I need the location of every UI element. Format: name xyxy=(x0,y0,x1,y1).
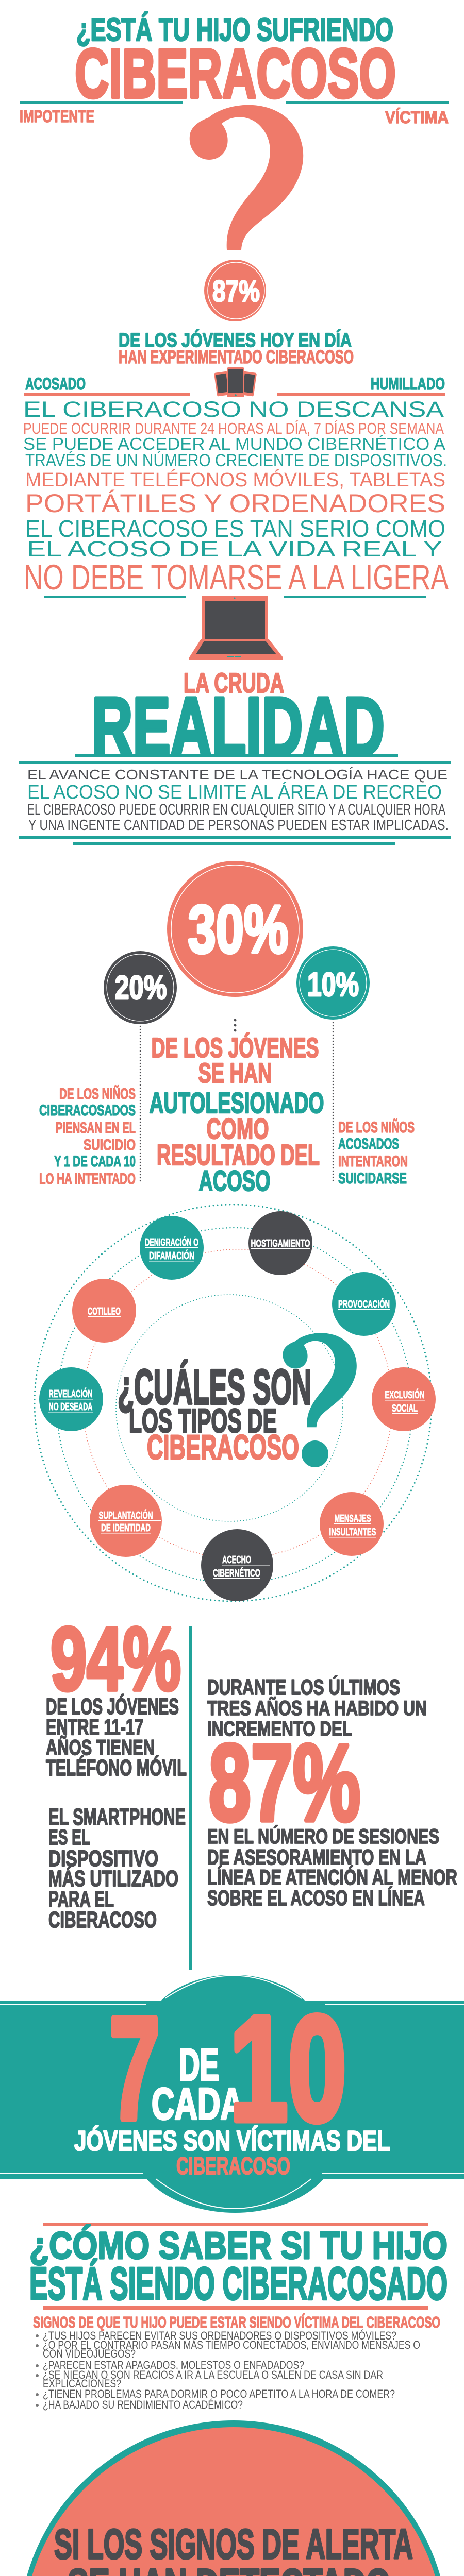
bubble: provocación: PROVOCACIÓN xyxy=(338,1298,390,1310)
stat: 94% mobile phones xyxy=(46,1608,187,1781)
stat: smartphone xyxy=(48,1804,186,1933)
stat: 94% mobile phones: ENTRE 11-17 xyxy=(46,1715,143,1740)
banner: 7 de cada 10: DE xyxy=(179,2039,219,2090)
text block: 30% autolesionado: COMO xyxy=(206,1112,269,1145)
bubble: suplantación de identidad xyxy=(90,1485,162,1557)
text block: 30% autolesionado: ACOSO xyxy=(199,1164,270,1197)
stat: smartphone: ES EL xyxy=(48,1825,90,1849)
banner: 7 de cada 10: 7 xyxy=(109,1987,160,2149)
banner: 7 de cada 10: 10 xyxy=(229,1985,346,2152)
icon: big question mark with 87%: 87% xyxy=(212,275,260,308)
bubble: mensajes insultantes xyxy=(320,1492,384,1556)
chart: 30% circle xyxy=(167,861,303,997)
icon: phones xyxy=(214,367,257,397)
heading: cómo saber xyxy=(29,2224,448,2309)
chart: 20% circle: 20% xyxy=(114,969,167,1006)
bubble: denigración: DENIGRACIÓN O xyxy=(145,1236,198,1248)
bubble: acecho cibernético xyxy=(201,1529,273,1601)
banner: 7 de cada 10: CIBERACOSO xyxy=(176,2152,290,2179)
stat: 87% increase: 87% xyxy=(209,1722,360,1843)
text block: 20% suicide thoughts xyxy=(39,1085,136,1188)
text block: 20% suicide thoughts: PIENSAN EN EL xyxy=(56,1120,136,1137)
text block: 30% autolesionado xyxy=(150,1032,324,1197)
text block: avance tecnología xyxy=(27,767,449,834)
text block: el ciberacoso no descansa: SE PUEDE ACCEDER AL MUNDO CIBERNÉTICO A xyxy=(23,434,445,453)
label: impotente: IMPOTENTE xyxy=(20,107,94,126)
bubble: provocación xyxy=(332,1272,396,1336)
text block: avance tecnología: EL ACOSO NO SE LIMITE AL ÁREA DE RECREO xyxy=(27,781,442,803)
heading: cuáles son los tipos: ¿CUÁLES SON xyxy=(118,1360,311,1415)
text block: el ciberacoso no descansa xyxy=(23,397,449,597)
text block: 10% suicide attempts: DE LOS NIÑOS xyxy=(338,1118,415,1136)
text block: 20% suicide thoughts: Y 1 DE CADA 10 xyxy=(54,1153,136,1170)
stat: 94% mobile phones: DE LOS JÓVENES xyxy=(46,1693,179,1719)
list: signs of victim: CON VIDEOJUEGOS? xyxy=(43,2347,136,2360)
bubble: acecho cibernético: ACECHO xyxy=(222,1554,251,1566)
bubble: exclusión social xyxy=(372,1367,436,1431)
banner: 7 de cada 10: 7 xyxy=(109,1987,160,2149)
bubble: exclusión social: EXCLUSIÓN xyxy=(385,1388,425,1401)
list: signs of victim: ¿SE NIEGAN O SON REACIOS A IR A LA ESCUELA O SALEN DE CASA SIN DAR xyxy=(43,2368,383,2381)
label: acosado: ACOSADO xyxy=(25,375,86,393)
stat text: 87% youth: DE LOS JÓVENES HOY EN DÍA xyxy=(119,329,352,351)
banner: 7 de cada 10 xyxy=(0,1975,464,2213)
bubble: suplantación de identidad: DE IDENTIDAD xyxy=(101,1522,151,1534)
text block: 20% suicide thoughts: SUICIDIO xyxy=(84,1137,136,1154)
stat: 87% increase xyxy=(207,1674,457,1910)
stat: smartphone: CIBERACOSO xyxy=(48,1907,157,1933)
bubble: cotilleo xyxy=(72,1279,136,1343)
text block: 10% suicide attempts xyxy=(338,1118,415,1187)
icon: laptop xyxy=(189,596,283,660)
bubble: hostigamiento xyxy=(248,1211,312,1275)
icon: big question mark with 87% xyxy=(190,105,303,321)
stat: smartphone: MÁS UTILIZADO xyxy=(48,1866,178,1891)
heading: la cruda realidad: LA CRUDA xyxy=(184,668,284,699)
bubble: cotilleo: COTILLEO xyxy=(88,1306,121,1317)
chart: 30% circle: 30% xyxy=(188,891,289,967)
list: signs of victim xyxy=(33,2313,440,2411)
callout: alert balloon xyxy=(19,2420,449,2576)
stat: 87% increase: INCREMENTO DEL xyxy=(207,1718,352,1740)
diagram: types of cyberbullying xyxy=(35,1205,436,1601)
label: víctima: VÍCTIMA xyxy=(385,108,449,127)
bubble: acecho cibernético: CIBERNÉTICO xyxy=(213,1567,260,1579)
bubble: denigración: DIFAMACIÓN xyxy=(149,1249,194,1262)
icon: teal question mark xyxy=(283,1333,357,1427)
text block: 10% suicide attempts: SUICIDARSE xyxy=(338,1170,407,1187)
stat: 94% mobile phones: 94% xyxy=(51,1608,181,1709)
bubble: revelación no deseada xyxy=(39,1367,103,1431)
text block: 30% autolesionado: AUTOLESIONADO xyxy=(150,1087,324,1120)
text block: avance tecnología: EL AVANCE CONSTANTE DE LA TECNOLOGÍA HACE QUE xyxy=(27,767,448,783)
text block: el ciberacoso no descansa: EL CIBERACOSO NO DESCANSA xyxy=(23,397,444,422)
bubble: revelación no deseada: NO DESEADA xyxy=(48,1401,93,1413)
stat: smartphone: DISPOSITIVO xyxy=(48,1846,158,1871)
text block: 30% autolesionado: DE LOS JÓVENES xyxy=(152,1032,319,1063)
text block: el ciberacoso no descansa: PORTÁTILES Y ORDENADORES xyxy=(25,489,445,518)
heading: cuáles son los tipos xyxy=(118,1360,311,1467)
divider: vertical teal line xyxy=(189,1626,192,1970)
chart: 10% circle: 10% xyxy=(307,965,359,1003)
stat text: 87% youth xyxy=(119,329,354,367)
text block: 10% suicide attempts: ACOSADOS xyxy=(338,1136,399,1153)
bubble: exclusión social: SOCIAL xyxy=(392,1403,418,1414)
stat: 94% mobile phones: AÑOS TIENEN xyxy=(46,1735,155,1759)
banner: 7 de cada 10: 10 xyxy=(229,1985,346,2152)
bubble: mensajes insultantes: MENSAJES xyxy=(334,1513,371,1524)
stat text: 87% youth: HAN EXPERIMENTADO CIBERACOSO xyxy=(119,346,354,367)
list: signs of victim: EXPLICACIONES? xyxy=(43,2377,121,2390)
text block: 10% suicide attempts: INTENTARON xyxy=(338,1153,408,1170)
list: signs of victim: ¿PARECEN ESTAR APAGADOS, MOLESTOS O ENFADADOS? xyxy=(43,2359,304,2371)
banner: 7 de cada 10: CADA xyxy=(152,2079,243,2129)
text block: el ciberacoso no descansa: EL ACOSO DE LA VIDA REAL Y xyxy=(27,537,442,562)
bubble: revelación no deseada: REVELACIÓN xyxy=(48,1387,93,1400)
stat: 87% increase: DURANTE LOS ÚLTIMOS xyxy=(207,1674,400,1699)
text block: 20% suicide thoughts: CIBERACOSADOS xyxy=(39,1102,136,1119)
bubble: hostigamiento: HOSTIGAMIENTO xyxy=(251,1238,310,1249)
stat: smartphone: PARA EL xyxy=(48,1887,114,1912)
bubble: suplantación de identidad: SUPLANTACIÓN xyxy=(99,1509,153,1521)
title xyxy=(75,12,396,112)
bubble: mensajes insultantes: INSULTANTES xyxy=(329,1527,376,1538)
text block: 20% suicide thoughts: LO HA INTENTADO xyxy=(39,1171,136,1188)
text block: 30% autolesionado: RESULTADO DEL xyxy=(157,1139,320,1172)
text block: el ciberacoso no descansa: EL CIBERACOSO ES TAN SERIO COMO xyxy=(25,515,445,542)
text block: 20% suicide thoughts: DE LOS NIÑOS xyxy=(59,1085,136,1103)
chart: 20% circle xyxy=(104,951,177,1024)
stat: 94% mobile phones: TELÉFONO MÓVIL xyxy=(46,1755,187,1781)
heading: cuáles son los tipos: CIBERACOSO xyxy=(147,1428,299,1467)
heading: cuáles son los tipos: LOS TIPOS DE xyxy=(129,1402,277,1439)
list: signs of victim: ¿HA BAJADO SU RENDIMIENTO ACADÉMICO? xyxy=(43,2398,243,2411)
stat: smartphone: EL SMARTPHONE xyxy=(48,1804,186,1830)
text block: 30% autolesionado: SE HAN xyxy=(198,1058,272,1089)
bubble: denigración xyxy=(140,1216,204,1280)
text block: el ciberacoso no descansa: MEDIANTE TELÉFONOS MÓVILES, TABLETAS xyxy=(25,469,445,491)
chart: 10% circle xyxy=(296,946,370,1020)
